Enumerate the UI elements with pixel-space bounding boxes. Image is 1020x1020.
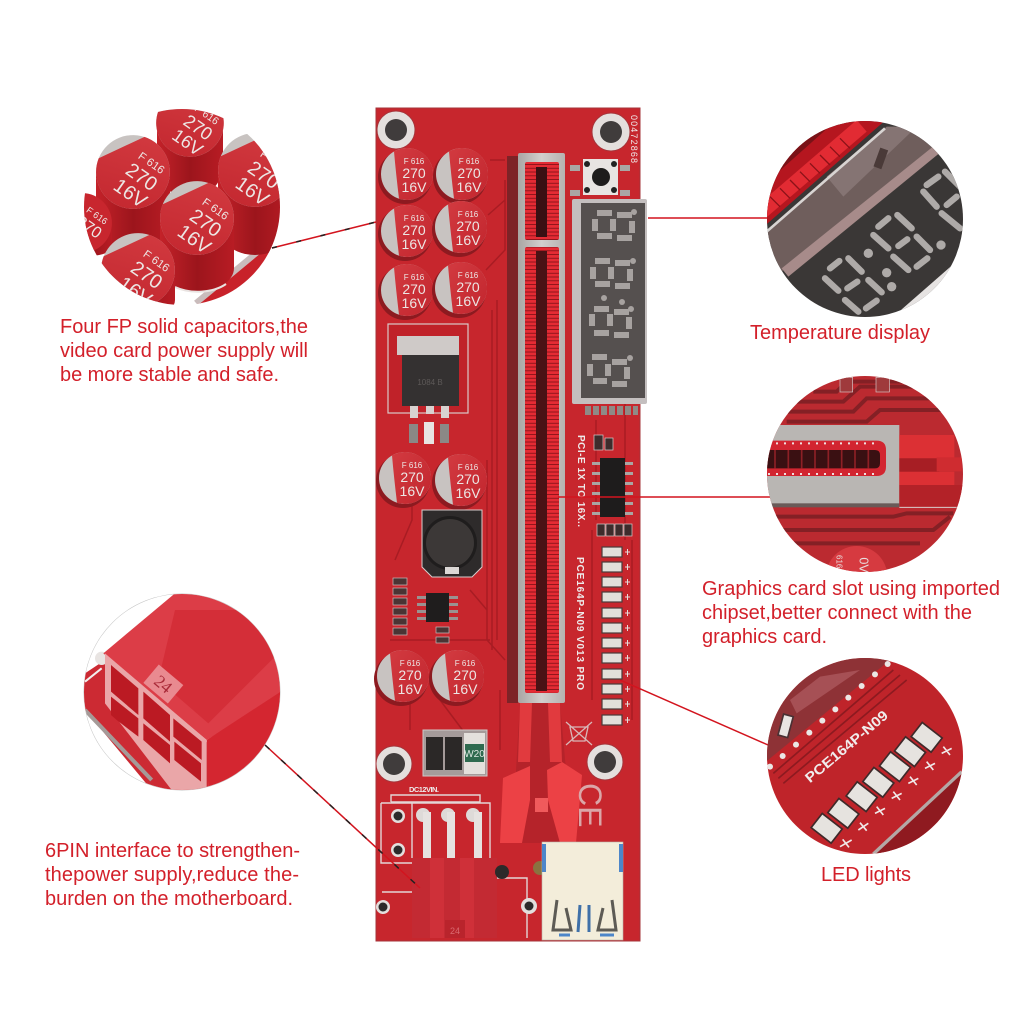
capacitor 10: F 616 [455,659,476,668]
24 label [143,665,183,703]
pcb traces [390,160,632,750]
capacitor 4 [432,201,487,257]
capacitor right [218,134,280,255]
capacitor bottom left: 16V [114,273,156,311]
capacitor bottom left: F 616 [141,248,171,275]
label: capacitors: video card power supply will [60,340,308,362]
pcb traces [767,376,963,572]
CE mark: CE [572,783,608,827]
capacitor 5: 270 [402,281,426,297]
capacitor 2: 270 [457,165,481,181]
diodes and fuse: W20 [464,749,485,760]
capacitor 7: F 616 [402,461,423,470]
capacitor center [160,181,234,293]
capacitor 5: 16V [402,295,427,311]
weee symbol [566,722,592,745]
power header outline [381,795,490,863]
connector front frame [105,653,207,790]
detail circle: 6pin outline [84,594,280,790]
USB 3.0 port [542,842,623,940]
capacitor 9: 16V [398,681,423,697]
LED lights column [602,547,630,725]
capacitor 9: 270 [398,667,422,683]
capacitor bottom left: 270 [126,257,166,294]
capacitor far left: 270 [73,212,105,242]
capacitor top: F 616 [192,103,221,128]
silver shell [760,425,899,507]
capacitor 8: F 616 [458,463,479,472]
PCI-E 16x slot [507,153,565,703]
digit dots [864,240,946,291]
pcb base [376,108,640,941]
latch right paddle [547,762,582,843]
label: 6pin interface: 6PIN interface to strengthen- [45,840,300,862]
capacitor left: 270 [121,159,161,196]
small resistors near chip [594,435,632,536]
solder dots [767,661,891,770]
capacitor right: 16V [231,173,273,211]
capacitor 1: F 616 [404,157,425,166]
capacitor top: 270 [180,111,216,144]
leader line: display [648,217,768,219]
white background and pcb sliver [84,100,280,310]
24 label: 24 [150,672,176,697]
DC input silk label: DC12VIN. [409,785,439,794]
label: capacitors [60,316,308,386]
capacitor 1 [378,148,433,204]
capacitor 8 [432,454,487,510]
capacitor 6 [432,262,487,318]
bottom right edge [901,266,951,310]
capacitor 10: 270 [453,667,477,683]
capacitor left [96,135,170,244]
pcb [75,660,208,790]
capacitor 3: 270 [402,222,426,238]
capacitor 5 [378,264,433,320]
capacitor 6: F 616 [458,271,479,280]
mounting hole top left [377,111,415,149]
capacitor 4: 270 [456,218,480,234]
detail circle: graphics slot: 0V [856,557,870,573]
red latch [899,435,954,458]
7-segment temperature display [572,199,647,404]
capacitor 2: F 616 [459,157,480,166]
capacitor 4: F 616 [458,210,479,219]
white corners [75,590,288,790]
connector side [206,692,280,786]
capacitor 4: 16V [456,232,481,248]
header pins [423,812,482,859]
base [767,121,963,317]
pin windows [111,665,202,782]
header pads [391,808,480,857]
latch left paddle [500,766,530,843]
mounting hole bottom left [376,746,412,782]
detail circle: LED lights [767,658,963,854]
silk model text: PCE164P-N09 [802,707,891,786]
inductor [422,510,482,577]
latch center block [535,798,548,812]
label: capacitors: Four FP solid capacitors,the [60,316,308,338]
capacitor 2 [433,148,488,204]
tooth gaps [770,138,850,207]
slot red teeth [767,121,883,224]
capacitor top: 16V [168,125,207,160]
voltage regulator [388,324,468,444]
capacitor 3: 16V [402,236,427,252]
mounting hole bottom right [587,744,623,780]
label: graphics card slot: Graphics card slot using imported [702,578,1000,600]
latch center [516,703,566,843]
mounting hole top right [592,113,630,151]
capacitor bottom left [102,233,175,305]
leader line: LED [620,680,768,745]
capacitor 1: 270 [402,165,426,181]
label: 6pin interface [45,840,300,910]
capacitor center: 16V [173,221,215,259]
capacitor far left: F 616 [84,205,109,227]
detail circle: capacitors [84,109,280,305]
capacitor 10: 16V [453,681,478,697]
board silk text: PCI-E 1X TO 16X.. [575,435,586,527]
capacitor right: F 616 [258,148,288,175]
reset button [570,159,630,196]
leader line: 6pin [265,745,420,888]
detail circle: graphics slot: 616 [835,555,844,569]
riser board [374,108,647,941]
label: temperature display: Temperature display [750,322,930,344]
plus marks [840,747,952,847]
capacitor edge [828,546,886,572]
capacitor 10 [429,650,484,706]
leader line: capacitors [272,222,376,248]
capacitor 6: 270 [456,279,480,295]
detail circle: 6pin connector [75,590,288,790]
serial number: 00472868 [629,115,639,163]
label: graphics card slot [702,578,1000,648]
board edge and beyond [876,774,962,854]
capacitor 7 [376,452,431,508]
capacitor 3 [378,205,433,261]
model silk text: PCE164P-N09 V013 PRO [574,557,585,690]
capacitor 2: 16V [457,179,482,195]
SOP chip [417,593,458,622]
trace stripes [773,670,907,783]
voltage regulator: 1084 B [417,378,443,387]
detail circle: graphics slot [767,376,963,572]
slot opening [760,441,886,476]
capacitor 3: F 616 [404,214,425,223]
label: capacitors: be more stable and safe. [60,364,279,386]
label: 6pin interface: burden on the motherboard. [45,888,293,910]
capacitor 1: 16V [402,179,427,195]
capacitor top [156,109,224,192]
capacitor center: F 616 [200,196,230,223]
capacitor far left [84,193,112,256]
6pin connector on board: 24 [450,926,460,936]
capacitor 8: 16V [456,485,481,501]
latch [500,703,582,843]
capacitor 7: 270 [400,469,424,485]
digit segments [825,172,960,312]
label: LED lights: LED lights [821,864,911,886]
capacitor 9: F 616 [400,659,421,668]
6pin connector on board [412,858,497,938]
capacitor right: 270 [243,157,283,194]
label: graphics card slot: chipset,better connect with the [702,602,972,624]
capacitor left: F 616 [136,150,166,177]
small resistors column [393,578,449,643]
silver band [768,128,934,271]
capacitor 8: 270 [456,471,480,487]
diodes and fuse [423,730,487,776]
detail circle: temperature display [767,121,963,317]
label: 6pin interface: thepower supply,reduce the- [45,864,299,886]
slot housing [767,658,889,761]
capacitor center: 270 [185,205,225,242]
capacitor 9 [374,650,429,706]
capacitor 6: 16V [456,293,481,309]
capacitor 7: 16V [400,483,425,499]
label: graphics card slot: graphics card. [702,626,827,648]
pink strip [782,145,940,277]
leader line: slot [558,496,770,498]
display driver chip [592,458,633,517]
lower silk lines and holes [376,861,547,938]
pcb [767,658,963,854]
display pin row [585,406,638,415]
connector top [103,593,288,740]
capacitor 5: F 616 [404,273,425,282]
capacitor left: 16V [109,175,151,213]
LED components [811,722,942,843]
